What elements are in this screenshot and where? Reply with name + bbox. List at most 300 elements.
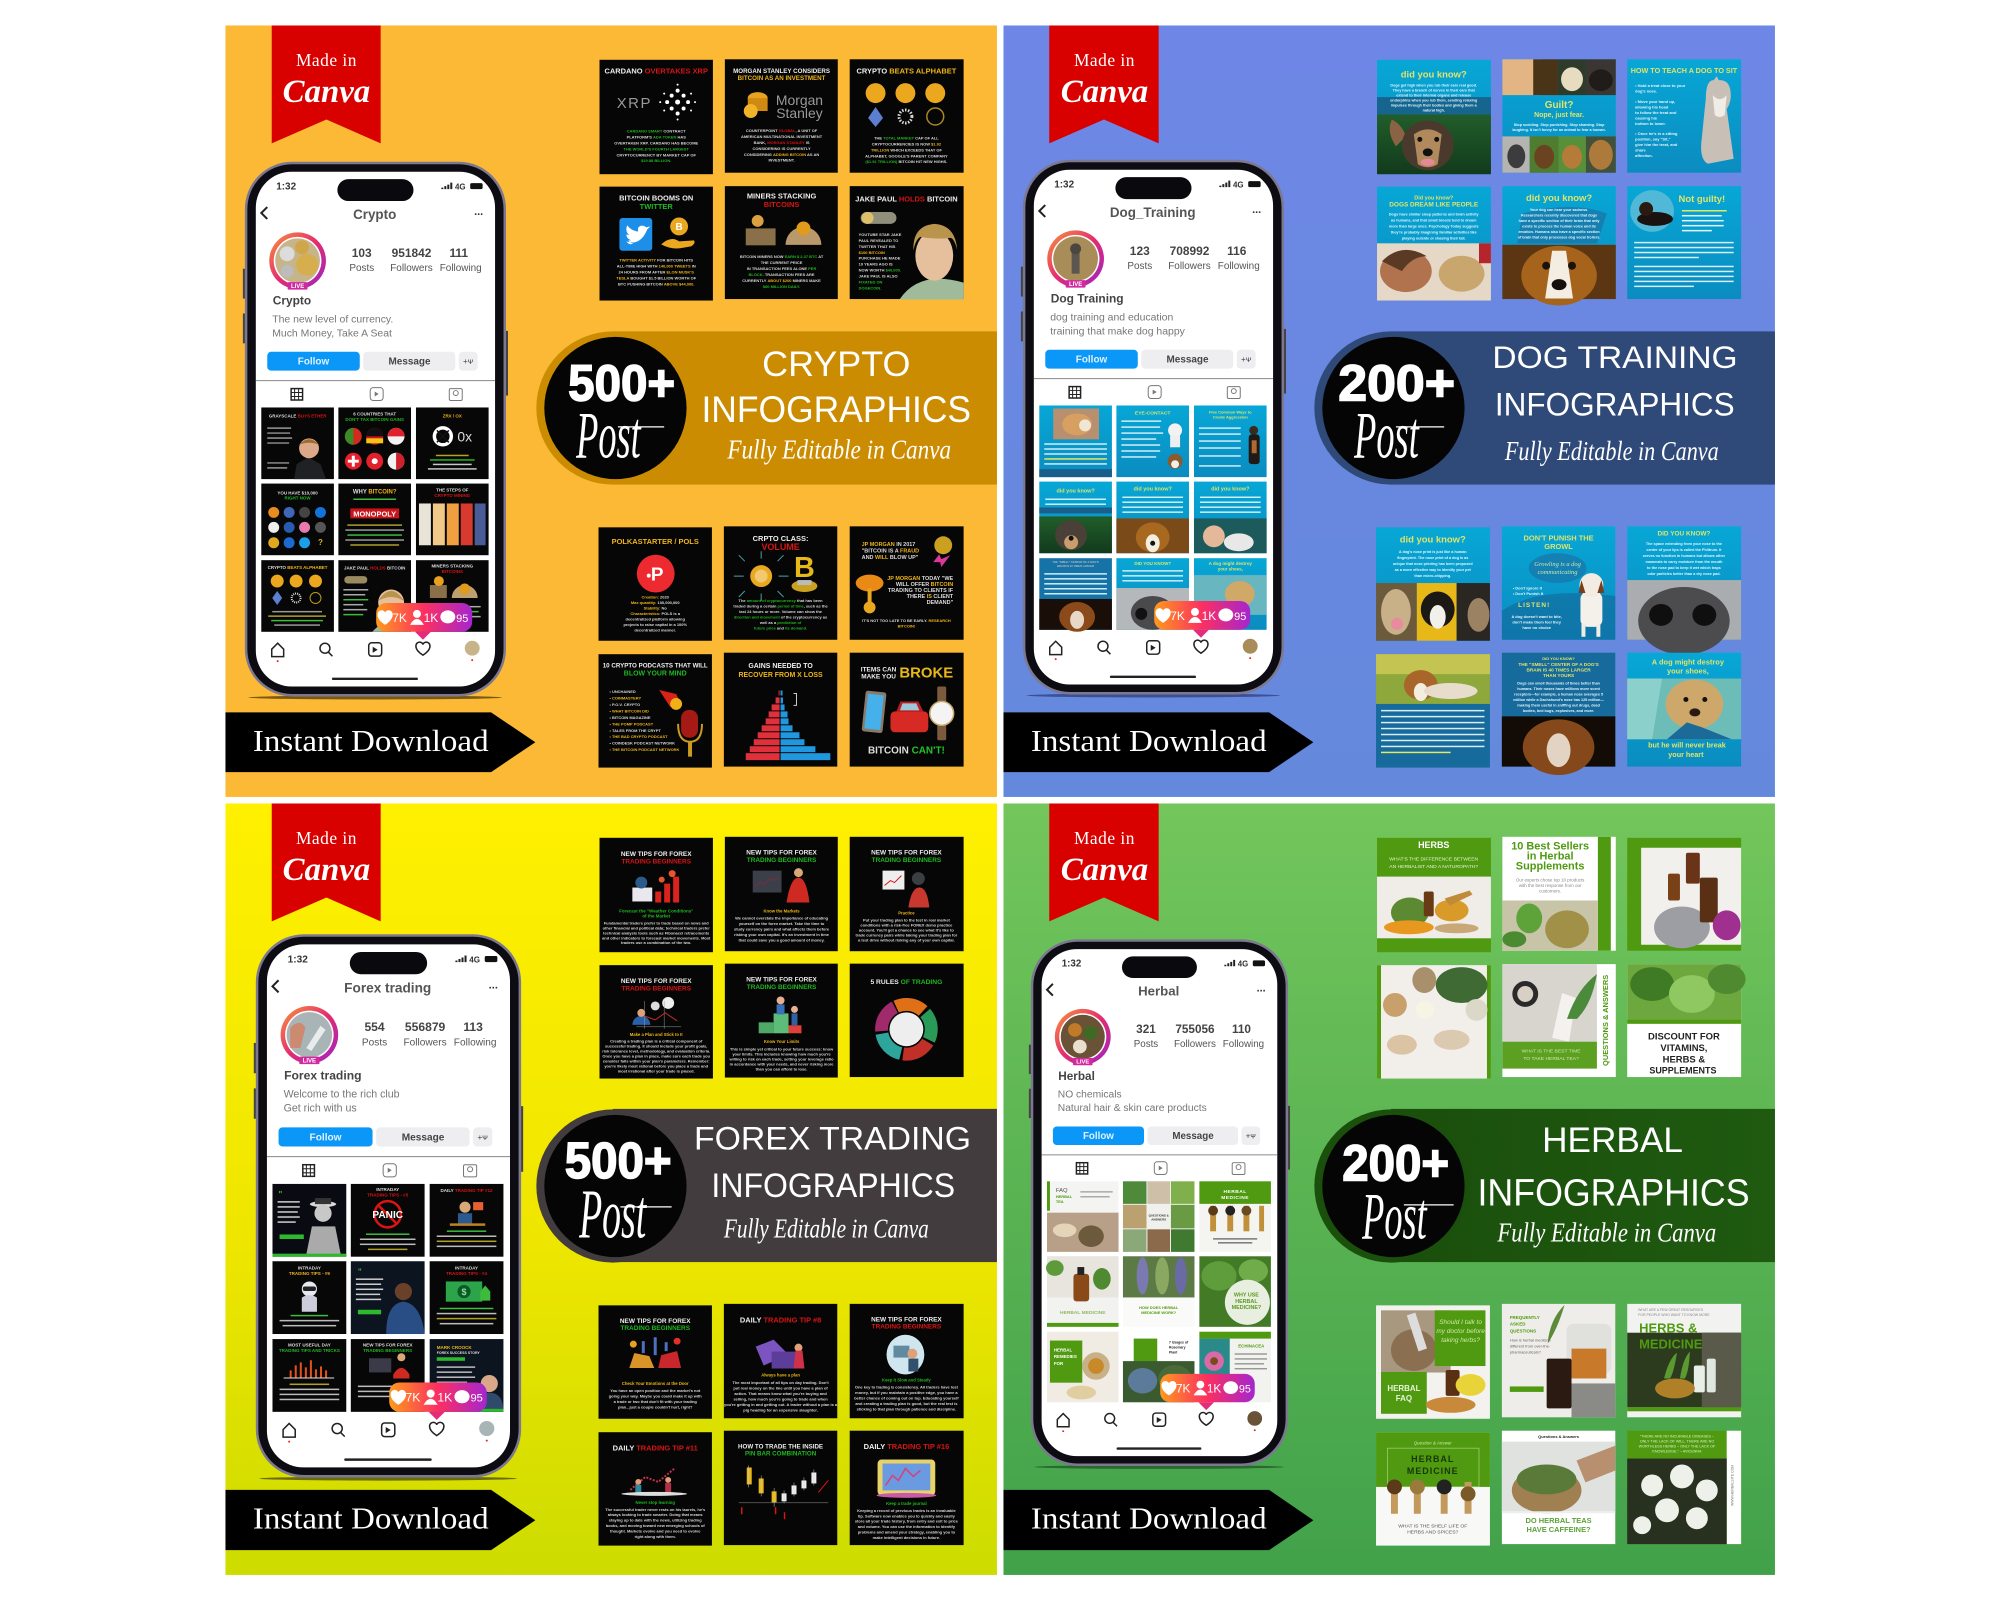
- grid post: herbal collage: [1123, 1181, 1194, 1252]
- thumbnail: ten best sellers: in Herbal: [1527, 851, 1574, 863]
- title band: forex trading: Post: [579, 1177, 647, 1254]
- title band: forex trading: INFOGRAPHICS: [711, 1167, 955, 1205]
- thumbnail: dogs dream like people: they're probably imagining familiar activities like: [1391, 230, 1477, 234]
- grid post: intraday tip 9: TRADING TIPS - #9: [289, 1271, 330, 1276]
- thumbnail: crypto podcasts: • THE BAD CRYPTO PODCAST: [609, 734, 668, 739]
- thumbnail: guilt nope just fear: [1502, 59, 1616, 173]
- grid post: intraday tip 9: [272, 1261, 346, 1334]
- thumbnail: keep it slow and steady: One key to trading is consistency. All traders have lost: [855, 1384, 959, 1389]
- grid post: daily trading tip 12: [430, 1184, 503, 1257]
- thumbnail: crypto podcasts: • P.O.V. CRYPTO: [609, 702, 640, 707]
- thumbnail: know the markets: We cannot overstate the importance of educating: [735, 915, 829, 920]
- phone mockup: crypto profile: 4G: [455, 183, 466, 192]
- thumbnail: jake paul holds bitcoin: PAUL REVEALED TO: [859, 238, 898, 243]
- thumbnail: did you know dog ears: [1377, 60, 1491, 174]
- thumbnail: know your limits: [725, 964, 838, 1078]
- thumbnail: crypto podcasts: • COINMASTERY: [609, 695, 641, 700]
- thumbnail: crypto class volume: last 24 hours or more. Volume can show the: [739, 609, 823, 614]
- thumbnail: make a plan: Once you have a plan in place, make sure each trade you: [602, 1054, 711, 1059]
- thumbnail: daily trading tip 11: DAILY TRADING TIP #11: [613, 1444, 698, 1453]
- thumbnail: dog nose print: unique that nose printing has been proposed: [1393, 562, 1473, 566]
- thumbnail: smell center: BRAIN IS 40 TIMES LARGER: [1526, 668, 1591, 674]
- ribbon: made in canva: Made in: [296, 50, 357, 70]
- notification bubble: 95: [456, 613, 468, 625]
- notification bubble: 95: [1239, 1383, 1251, 1395]
- thumbnail: crypto podcasts: • COINDESK PODCAST NETWORK: [609, 741, 675, 746]
- thumbnail: jake paul holds bitcoin: [850, 186, 964, 300]
- profile stats: Followers: [404, 1037, 447, 1048]
- thumbnail: practice: trade currency pairs while taking your trading plan for: [855, 932, 958, 937]
- thumbnail: frequently asked questions: pharmaceuticals?: [1510, 1350, 1542, 1355]
- banner: instant download: Instant Download: [253, 1502, 489, 1536]
- grid post: mark crook: MARK CROOCK: [437, 1345, 472, 1350]
- avatar: herbs: LIVE: [1076, 1060, 1089, 1066]
- thumbnail: cardano overtakes xrp: OVERTAKEN XRP. CARDANO HAS BECOME: [614, 140, 699, 145]
- grid post: mark crook: FOREX SUCCESS STORY: [437, 1351, 480, 1355]
- notification bubble: [1160, 1374, 1255, 1410]
- thumbnail: polkastarter: [599, 527, 712, 641]
- ribbon: made in canva: Canva: [1061, 74, 1148, 110]
- grid post: intraday tip 4: TRADING TIPS - #4: [446, 1271, 488, 1276]
- thumbnail: no incurable diseases: "THERE ARE NO INCURABLE DISEASES –: [1640, 1435, 1715, 1439]
- grid post: ZRX: [416, 407, 489, 479]
- thumbnail: dogs dream like people: Dogs have similar sleep patterns and brain activity: [1389, 212, 1480, 216]
- thumbnail: herbal medicine shelf life: HERBS AND SPICES?: [1407, 1530, 1459, 1536]
- thumbnail: don't punish the growl: [1502, 526, 1615, 640]
- grid post: six countries: DON'T TAX BITCOIN GAINS: [345, 417, 404, 422]
- thumbnail: crypto class volume: future price and its demand.: [754, 625, 807, 630]
- profile bio: [1050, 292, 1186, 337]
- thumbnail: jp morgan: JP MORGAN IN 2017: [862, 542, 915, 548]
- thumbnail: ten best sellers: Our experts chose top 10 products: [1516, 878, 1585, 883]
- grid post: most useful day trading tips: TRADING TIPS AND TRICKS: [279, 1348, 340, 1353]
- thumbnail: practice: [850, 837, 964, 951]
- thumbnail: beagle: Researchers recently discovered that dogs: [1521, 213, 1597, 217]
- profile buttons: [267, 352, 478, 371]
- thumbnail: miners stacking bitcoins: MINERS STACKING: [747, 192, 816, 201]
- thumbnail: make a plan: consider falls within your plan's parameters. Remember:: [603, 1059, 710, 1064]
- thumbnail: did you know dog ears: did you know?: [1401, 70, 1467, 81]
- thumbnail: daily trading tip 16: and volume. You can use the information to identify: [858, 1524, 956, 1529]
- thumbnail: always have a plan: you're getting in and getting out. A trader without a plan is a: [724, 1402, 838, 1407]
- thumbnail: make a plan: you're likely most rational before you place a trade and: [604, 1064, 709, 1069]
- thumbnail: herbs herbalist vs naturopath: AN HERBALIST AND A NATUROPATH?: [1389, 864, 1478, 870]
- thumbnail: jake paul holds bitcoin: $100 BITCOIN: [859, 250, 885, 255]
- thumbnail: jp morgan: AND WILL BLOW UP": [862, 555, 919, 561]
- grid post: faq herbal tea: HERBAL: [1056, 1194, 1073, 1199]
- profile buttons: Message: [1167, 355, 1209, 366]
- thumbnail: herbal faq: my doctor before: [1436, 1328, 1485, 1335]
- grid post: intraday tip 4: $: [461, 1287, 467, 1297]
- thumbnail: did you know dog ears: natural high.: [1423, 109, 1445, 113]
- avatar: crypto coins: [269, 232, 326, 290]
- thumbnail: not guilty: [1627, 186, 1741, 299]
- title band: herbal: Fully Editable in Canva: [1497, 1218, 1716, 1249]
- profile stats: 951842: [392, 246, 432, 260]
- thumbnail: did you know philtrum: [1627, 526, 1741, 655]
- thumbnail: morgan stanley: Morgan: [776, 92, 823, 108]
- thumbnail: keep it slow and steady: Keep It Slow and Steady: [882, 1377, 931, 1382]
- grid post: you have 10000: YOU HAVE $10,000: [277, 491, 318, 496]
- thumbnail: how to teach a dog to sit: [1627, 59, 1741, 173]
- thumbnail: keep it slow and steady: TRADING BEGINNERS: [872, 1324, 942, 1331]
- thumbnail: always have a plan: put real money on the line until you have a plan of: [733, 1385, 828, 1390]
- thumbnail: how to teach a dog to sit: • Once he's in a sitting: [1635, 131, 1678, 136]
- profile buttons: Follow: [298, 357, 330, 368]
- thumbnail: daily trading tip 16: make intelligent decisions in future.: [873, 1535, 940, 1540]
- banner: instant download: Instant Download: [253, 724, 489, 758]
- thumbnail: miners stacking bitcoins: $60 MILLION DAILY.: [763, 284, 800, 289]
- notification bubble: 95: [470, 1393, 483, 1405]
- profile stats: Posts: [1127, 261, 1152, 272]
- thumbnail: know the markets: study currency pairs and what affects them before: [734, 926, 830, 931]
- profile bio: The new level of currency.: [272, 314, 393, 325]
- phone mockup: herbal profile: Herbal: [1138, 984, 1179, 999]
- grid post: why use herbal medicine: WHY USE: [1234, 1292, 1259, 1298]
- thumbnail: frequently asked questions: ASKED: [1510, 1322, 1526, 1327]
- ribbon: made in canva: Made in: [1074, 828, 1135, 848]
- thumbnail: daily trading tip 16: Keep a trade journal: [886, 1501, 927, 1506]
- profile stats: Following: [1223, 1039, 1264, 1050]
- thumbnail: polkastarter: Max quantity: 100,000,000: [631, 600, 680, 605]
- thumbnail: cardano overtakes xrp: CARDANO OVERTAKES XRP: [605, 67, 708, 76]
- thumbnail: daily trading tip 11: always looking to trade smarter. Doing that means: [608, 1512, 703, 1517]
- grid post: why bitcoin: [338, 484, 411, 555]
- phone mockup: forex trading profile: ...: [489, 979, 498, 991]
- thumbnail: discount for vitamins: SUPPLEMENTS: [1649, 1066, 1716, 1076]
- thumbnail: how to teach a dog to sit: share: [1635, 147, 1647, 152]
- grid post: grayscale: GRAYSCALE BUYS ETHER: [269, 413, 327, 418]
- grid post: usages of rosemary: Rosemary: [1169, 1345, 1186, 1349]
- grid post: five common ways: [1194, 405, 1267, 477]
- thumbnail: herbal faq: FAQ: [1396, 1394, 1412, 1403]
- grid post: did you know child and dog: [1194, 482, 1267, 553]
- thumbnail: herbs and medicine: WHAT ARE A FEW GREAT RESOURCES: [1638, 1308, 1704, 1312]
- thumbnail: questions and answers: WHAT IS THE BEST TIME: [1522, 1049, 1581, 1055]
- profile bio: NO chemicals: [1058, 1090, 1122, 1101]
- thumbnail: do herbal teas have caffeine: [1502, 1431, 1615, 1544]
- thumbnail: morgan stanley: CONSIDERING IS CURRENTLY: [753, 146, 811, 151]
- thumbnail: always have a plan: Always have a plan: [761, 1372, 800, 1377]
- grid post: usages of rosemary: [1123, 1332, 1194, 1402]
- thumbnail: items can make you broke: MAKE YOU: [861, 674, 896, 681]
- notification bubble: 1K: [1207, 1382, 1221, 1395]
- grid post: quote businessman: ": [358, 1267, 362, 1276]
- thumbnail: jake paul holds bitcoin: YOUTUBE STAR JAKE: [859, 232, 902, 237]
- profile bio: Dog Training: [1051, 292, 1124, 306]
- profile bio: training that make dog happy: [1050, 326, 1186, 337]
- thumbnail: beagle: did you know?: [1526, 193, 1592, 204]
- thumbnail: frequently asked questions: FREQUENTLY: [1510, 1315, 1540, 1320]
- thumbnail: crypto class volume: [724, 526, 837, 640]
- grid post: herbal medicine spoons: [1199, 1181, 1271, 1252]
- phone mockup: crypto profile: [243, 162, 508, 699]
- profile bio: Much Money, Take A Seat: [272, 328, 392, 339]
- grid post: ZRX: ZRX / OX: [443, 413, 462, 418]
- thumbnail: crypto podcasts: BLOW YOUR MIND: [624, 671, 687, 678]
- thumbnail: cardano overtakes xrp: CARDANO SMART CONTRACT: [627, 128, 686, 133]
- thumbnail: daily trading tip 11: The successful trader never rests on his laurels, he's: [605, 1507, 706, 1512]
- thumbnail: miners stacking bitcoins: [725, 186, 838, 299]
- avatar: trader: [281, 1006, 338, 1065]
- title band: crypto: CRYPTO: [762, 345, 910, 384]
- thumbnail: daily trading tip 16: DAILY TRADING TIP #16: [864, 1442, 949, 1451]
- profile bio: Herbal: [1058, 1070, 1095, 1083]
- thumbnail: herbal faq: [1376, 1305, 1490, 1419]
- profile stats: 113: [463, 1020, 483, 1034]
- thumbnail: jp morgan: "BITCOIN IS A FRAUD: [862, 549, 919, 555]
- thumbnail: jp morgan: WILL OFFER BITCOIN: [896, 582, 953, 588]
- thumbnail: ten best sellers: customers.: [1539, 889, 1561, 894]
- thumbnail: crypto class volume: VOLUME: [761, 542, 800, 552]
- grid post: eye contact: [1116, 405, 1189, 477]
- thumbnail: herbal medicine shelf life: MEDICINE: [1407, 1466, 1459, 1476]
- thumbnail: polkastarter: decentralized platform allowing: [626, 616, 685, 621]
- thumbnail: gains needed: [724, 653, 837, 767]
- thumbnail: pin bar combination: PIN BAR COMBINATION: [745, 1451, 817, 1458]
- phone mockup: herbal profile: 1:32: [1062, 959, 1082, 970]
- grid post: why use herbal medicine: HERBAL: [1235, 1299, 1258, 1305]
- thumbnail: polkastarter: projects to raise capital in a 100%: [623, 622, 687, 627]
- thumbnail: smell center: receptors—for example, a human nose averages 5: [1514, 692, 1603, 696]
- thumbnail: smell center: THE "SMELL" CENTER OF A DOG'S: [1518, 662, 1599, 668]
- thumbnail: smell center: DID YOU KNOW?: [1542, 656, 1575, 661]
- thumbnail: polkastarter: Stability: No: [644, 605, 667, 610]
- thumbnail: know the markets: risking your own capital. It's an investment in time: [734, 932, 830, 937]
- grid post: crypto mining steps: CRYPTO MINING: [434, 493, 471, 498]
- grid post: crypto mining steps: THE STEPS OF: [436, 488, 469, 493]
- thumbnail: bitcoin booms on twitter: B: [676, 222, 683, 233]
- thumbnail: know your limits: than you can afford to lose.: [756, 1067, 807, 1072]
- thumbnail: don't punish the growl: communicating: [1538, 569, 1578, 576]
- title band: forex trading: [536, 1109, 997, 1263]
- thumbnail: miners stacking bitcoins: BITCOINS: [764, 200, 799, 209]
- thumbnail: smell center: Dogs can smell thousands of times better than: [1517, 682, 1601, 686]
- profile buttons: +ᴪ: [477, 1133, 488, 1142]
- notification bubble: 7K: [1176, 1382, 1191, 1395]
- thumbnail: a dog might destroy your shoes: your heart: [1668, 750, 1704, 759]
- thumbnail: jake paul holds bitcoin: NOW WORTH $40,000.: [859, 268, 901, 273]
- thumbnail: check your emotions: a trade or two that don't fit with your trading: [614, 1399, 697, 1404]
- panel: forex trading infographics: [225, 803, 997, 1575]
- grid post: did you know child and dog: did you know?: [1211, 487, 1250, 493]
- grid post: faq herbal tea: FAQ: [1056, 1188, 1068, 1194]
- thumbnail: keep it slow and steady: NEW TIPS FOR FOREX: [871, 1316, 942, 1323]
- grid post: dog on blanket: [1039, 405, 1112, 477]
- grid post: you have 10000: ?: [318, 538, 323, 547]
- thumbnail: don't punish the growl: • Don't Ignore It: [1513, 586, 1543, 591]
- thumbnail: crypto class volume: well as a prediction of: [759, 620, 802, 625]
- title band: dog training: 200+: [1338, 355, 1455, 412]
- thumbnail: check your emotions: NEW TIPS FOR FOREX: [620, 1318, 691, 1325]
- thumbnail: check your emotions: [599, 1305, 712, 1419]
- thumbnail: ten best sellers: with the best response from our: [1519, 883, 1582, 888]
- avatar: dog: [1047, 230, 1104, 288]
- thumbnail: bitcoin booms on twitter: TWITTER ACTIVITY FOR BITCOIN HITS: [619, 258, 693, 263]
- grid post: why bitcoin: MONOPOLY: [353, 509, 396, 518]
- grid post: miners stacking: BITCOINS: [442, 569, 463, 574]
- thumbnail: jake paul holds bitcoin: 10 YEARS AGO IS: [859, 262, 893, 267]
- thumbnail: cardano overtakes xrp: $19.88 BILLION.: [641, 158, 671, 163]
- notification bubble: [1154, 601, 1250, 638]
- thumbnail: practice: conditions with a risk-free FOREX demo practice: [860, 922, 953, 927]
- thumbnail: cardano overtakes xrp: THE WORLD'S FOURTH LARGEST: [624, 146, 689, 151]
- grid post: how does herbal medicine work: [1123, 1256, 1194, 1327]
- thumbnail: forecast weather conditions: other financial and political data; technical traders prefer: [603, 925, 710, 930]
- thumbnail: jp morgan: JP MORGAN TODAY "WE: [887, 576, 954, 582]
- thumbnail: polkastarter: P: [651, 565, 664, 586]
- profile stats: Posts: [362, 1037, 387, 1048]
- title band: dog training: Fully Editable in Canva: [1504, 436, 1719, 467]
- banner: instant download: [1003, 712, 1313, 772]
- profile tab icons: [1076, 1162, 1245, 1174]
- thumbnail: daily trading tip 16: store all your trade history, from entry and exit to price: [855, 1519, 959, 1524]
- grid post: herbal remedies: FOR: [1054, 1361, 1064, 1366]
- thumbnail: practice: a test drive without risking any of your own capital.: [858, 937, 955, 942]
- title band: forex trading: Fully Editable in Canva: [723, 1214, 929, 1245]
- grid post: did you know ear rub: did you know?: [1056, 489, 1095, 495]
- title band: forex trading: FOREX TRADING: [694, 1121, 971, 1157]
- profile stats: 103: [352, 246, 372, 260]
- profile stats: 111: [449, 246, 468, 260]
- thumbnail: keep it slow and steady: sticking to that plan through patience and discipline.: [857, 1406, 956, 1411]
- profile buttons: Message: [1172, 1131, 1214, 1142]
- profile buttons: +ᴪ: [1246, 1132, 1256, 1141]
- thumbnail: crypto class volume: traded during a certain period of time, such as the: [733, 603, 829, 608]
- grid post: herbal collage: QUESTIONS &: [1149, 1214, 1170, 1218]
- thumbnail: don't punish the growl: GROWL: [1544, 542, 1573, 551]
- grid post: quote with man in hat: ": [279, 1190, 283, 1199]
- avatar: crypto coins: LIVE: [291, 284, 304, 290]
- grid post: did you know ear rub: [1039, 482, 1112, 553]
- grid post: faq herbal tea: [1047, 1181, 1119, 1252]
- thumbnail: no incurable diseases: WORTHLESS HERBS – ONLY THE LACK OF: [1639, 1445, 1716, 1449]
- profile tab icons: [291, 388, 462, 401]
- grid post: bottle and leaves: HERBAL MEDICINE: [1060, 1310, 1106, 1316]
- grid post: quote businessman: [351, 1261, 425, 1334]
- ribbon: made in canva: Canva: [1061, 852, 1148, 888]
- thumbnail: beagle: emotion. Humans also have a specific section: [1518, 230, 1600, 234]
- thumbnail: daily trading tip 16: [850, 1431, 964, 1545]
- thumbnail: crypto beats alphabet: THE TOTAL MARKET CAP OF ALL: [874, 135, 939, 140]
- thumbnail: ten best sellers: [1502, 837, 1616, 951]
- thumbnail: no incurable diseases: KNOWLEDGE." – AVICENNA: [1652, 1450, 1702, 1454]
- thumbnail: five rules of trading: [850, 964, 964, 1077]
- grid post: why bitcoin: WHY BITCOIN?: [353, 490, 397, 496]
- thumbnail: herbs and medicine: MEDICINE: [1639, 1337, 1703, 1352]
- thumbnail: herbs and medicine: FOR PEOPLE WHO WANT TO KNOW MORE: [1638, 1313, 1710, 1317]
- grid post: panic: TRADING TIPS - #5: [367, 1193, 409, 1198]
- thumbnail: morgan stanley: [725, 59, 838, 173]
- thumbnail: daily trading tip 11: books, and moving toward new emerging schools of: [606, 1523, 705, 1528]
- grid post: most useful day trading tips: [272, 1339, 346, 1412]
- thumbnail: dogs dream like people: as humans, and that small breeds tend to dream: [1391, 218, 1477, 222]
- profile buttons: Follow: [1076, 355, 1108, 366]
- thumbnail: keep it slow and steady: [850, 1304, 964, 1418]
- thumbnail: don't punish the growl: A dog doesn't want to bite,: [1511, 614, 1562, 619]
- ribbon: made in canva: [272, 803, 381, 921]
- thumbnail: pin bar combination: HOW TO TRADE THE INSIDE: [738, 1444, 823, 1451]
- thumbnail: dogs dream like people: DOGS DREAM LIKE PEOPLE: [1389, 202, 1479, 209]
- thumbnail: essential oils: [1627, 838, 1741, 951]
- thumbnail: smell center: THAN YOURS: [1543, 673, 1574, 679]
- thumbnail: make a plan: TRADING BEGINNERS: [621, 986, 692, 993]
- thumbnail: jp morgan: [850, 526, 964, 640]
- grid post: five common ways: Create Aggression: [1213, 414, 1248, 419]
- avatar: herbs: [1055, 1009, 1111, 1066]
- thumbnail: did you know philtrum: DID YOU KNOW?: [1657, 530, 1710, 537]
- thumbnail: crypto class volume: direction and movement of the cryptocurrency as: [734, 614, 828, 619]
- thumbnail: did you know dog ears: impulses through their bodies and giving them a: [1391, 104, 1478, 108]
- thumbnail: dogs dream like people: Did you know?: [1414, 196, 1454, 202]
- thumbnail: check your emotions: TRADING BEGINNERS: [620, 1325, 691, 1332]
- thumbnail: crypto podcasts: • THE POMP PODCAST: [609, 721, 654, 726]
- thumbnail: beagle: exists to process the human voice and its: [1522, 224, 1596, 228]
- thumbnail: jp morgan: DEMAND": [927, 600, 954, 606]
- grid post: smell center: [1039, 558, 1112, 632]
- thumbnail: herbal medicine shelf life: Question & Answer: [1414, 1441, 1452, 1446]
- thumbnail: don't punish the growl: • Don't Punish It: [1513, 591, 1544, 596]
- bottom navigation: [272, 641, 480, 680]
- thumbnail: polkastarter: POLKASTARTER / POLS: [612, 537, 699, 546]
- thumbnail: know the markets: yourself on the forex market. Take the time to: [739, 921, 825, 926]
- ribbon: made in canva: [1049, 803, 1159, 921]
- banner: instant download: [1003, 1490, 1313, 1550]
- thumbnail: don't punish the growl: don't make them feel they: [1512, 619, 1562, 624]
- thumbnail: herbs and medicine: HERBS &: [1639, 1321, 1697, 1336]
- thumbnail: cardano overtakes xrp: XRP: [617, 95, 652, 112]
- thumbnail: did you know philtrum: center of your lips is called the Philtrum. It: [1646, 548, 1722, 552]
- profile stats: [362, 1020, 496, 1048]
- profile bio: Forex trading: [284, 1068, 361, 1082]
- thumbnail: don't punish the growl: have no choice: [1522, 625, 1552, 630]
- thumbnail: know the markets: Know the Markets: [764, 908, 800, 913]
- phone mockup: dog training profile: [1021, 160, 1286, 697]
- ribbon: made in canva: [1049, 25, 1159, 143]
- profile tab icons: [303, 1164, 477, 1177]
- phone mockup: forex trading profile: [254, 934, 523, 1481]
- bottom navigation: [283, 1421, 494, 1461]
- panel: crypto infographics: [225, 25, 997, 797]
- panel: dog training infographics: [1003, 25, 1775, 797]
- profile stats: 556879: [405, 1020, 446, 1034]
- thumbnail: frequently asked questions: QUESTIONS: [1510, 1329, 1536, 1334]
- profile bio: [272, 294, 393, 339]
- panel: herbal infographics: [1003, 803, 1775, 1575]
- thumbnail: dogs dream like people: more than large ones. Psychology Today suggests: [1389, 224, 1479, 228]
- ribbon: made in canva: Canva: [283, 74, 370, 110]
- title band: forex trading: 500+: [565, 1132, 672, 1189]
- profile tab icons: [1069, 386, 1240, 399]
- phone mockup: dog training profile: 1:32: [1054, 180, 1075, 191]
- thumbnail: daily trading tip 11: [599, 1432, 712, 1546]
- bottom navigation: [1057, 1411, 1262, 1450]
- thumbnail: bitcoin booms on twitter: [600, 187, 713, 301]
- thumbnail: dog nose print: fingerprint. The nose print of a dog is as: [1397, 556, 1468, 560]
- grid post: panic: PANIC: [372, 1210, 404, 1221]
- thumbnail: beagle: [1502, 186, 1616, 306]
- grid post: you have 10000: RIGHT NOW: [285, 495, 311, 500]
- thumbnail: crypto class volume: The amount of cryptocurrency that has been: [739, 598, 823, 603]
- thumbnail: how to teach a dog to sit: affection.: [1635, 153, 1653, 158]
- thumbnail: miners stacking bitcoins: CURRENTLY ABOUT $200 MINERS MAKE: [742, 278, 821, 283]
- thumbnail: smell center: million while a Dachshund's nose has 125 million—: [1513, 698, 1604, 702]
- thumbnail: five rules of trading: 5 RULES OF TRADING: [870, 979, 942, 986]
- title band: dog training: DOG TRAINING: [1492, 340, 1738, 375]
- profile buttons: [1053, 1126, 1260, 1145]
- ribbon: made in canva: [272, 25, 381, 143]
- thumbnail: daily trading tip 11: Never stop learning: [636, 1500, 675, 1505]
